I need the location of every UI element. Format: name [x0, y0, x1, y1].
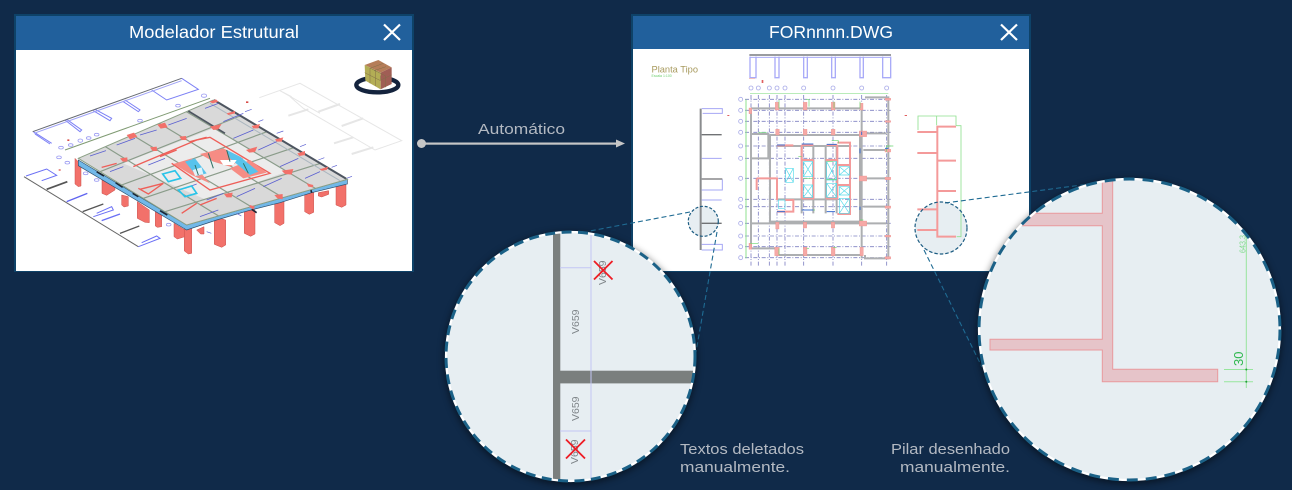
icon: close — [1001, 24, 1017, 40]
window header bar — [16, 16, 412, 50]
small zoom circle: right — [915, 202, 967, 254]
dimension label 30: 30 — [1231, 352, 1246, 366]
icon: red cross upper — [594, 261, 612, 280]
drawing scale: Escala 1:100 — [652, 74, 672, 78]
3D structural model — [24, 78, 402, 254]
grid lines — [745, 95, 892, 267]
beam label V659: V659 — [570, 309, 582, 334]
stair core — [163, 148, 267, 197]
connector lines: right magnifier — [924, 181, 1112, 367]
ghost floor outline — [259, 83, 402, 154]
upper architectural wing — [33, 78, 210, 150]
caption: Pilar desenhado manualmente: Pilar desenhado — [891, 442, 1010, 458]
red core walls — [757, 143, 850, 214]
icon: view cube — [356, 60, 398, 92]
drawing title: Planta Tipo: Planta Tipo — [652, 64, 698, 76]
caption: Pilar desenhado manualmente — [891, 442, 1010, 476]
caption: Pilar desenhado manualmente: manualmente. — [900, 460, 1010, 476]
panel: Modelador Estrutural window — [14, 14, 414, 272]
arrow: Automático — [417, 121, 625, 148]
floor slab — [78, 100, 347, 225]
slab labels — [90, 103, 320, 217]
right side pillar with zoom circle — [915, 116, 967, 254]
icon: red cross lower — [566, 440, 585, 458]
connector lines: left magnifier — [590, 212, 717, 352]
floor plan — [727, 55, 907, 267]
panel: FORnnnn.DWG window — [631, 14, 1031, 272]
magnifier: deleted texts — [444, 225, 700, 490]
green and blue annotations — [750, 99, 893, 255]
beam label V659 lower: V659 — [570, 396, 582, 421]
dimension label 643.3: 643.3 — [1238, 235, 1248, 253]
window header bar — [633, 16, 1029, 49]
columns — [75, 158, 346, 254]
pink columns — [749, 98, 891, 259]
slab beams — [100, 112, 321, 216]
grid bubbles — [57, 94, 207, 226]
slab red beams — [120, 99, 328, 209]
top elevation — [749, 55, 891, 78]
caption: Textos deletados manualmente: Textos deletados — [680, 442, 804, 458]
magnifier: manually drawn pillar — [978, 170, 1282, 484]
deleted label lower: V659 — [569, 439, 581, 464]
lower architectural wing — [24, 169, 160, 247]
magnifier rim — [979, 179, 1280, 480]
left side elevation with zoom circle — [688, 109, 722, 250]
small markers — [59, 101, 248, 171]
heading: Modelador Estrutural: Modelador Estrutural — [129, 22, 299, 42]
walls and beams — [751, 97, 888, 258]
small zoom circle: left — [688, 206, 718, 236]
arrow label: Automático — [478, 121, 565, 138]
magnifier rim — [446, 232, 695, 481]
caption: Textos deletados manualmente: manualmente. — [680, 460, 790, 476]
icon: close — [384, 24, 400, 40]
heading: FORnnnn.DWG: FORnnnn.DWG — [769, 22, 893, 42]
corridor around core — [123, 128, 287, 200]
caption: Textos deletados manualmente — [680, 442, 804, 476]
elevator crosses — [778, 162, 849, 213]
edge beams — [78, 160, 347, 230]
grid bubbles — [739, 86, 889, 260]
deleted label upper: V659 — [597, 260, 609, 285]
